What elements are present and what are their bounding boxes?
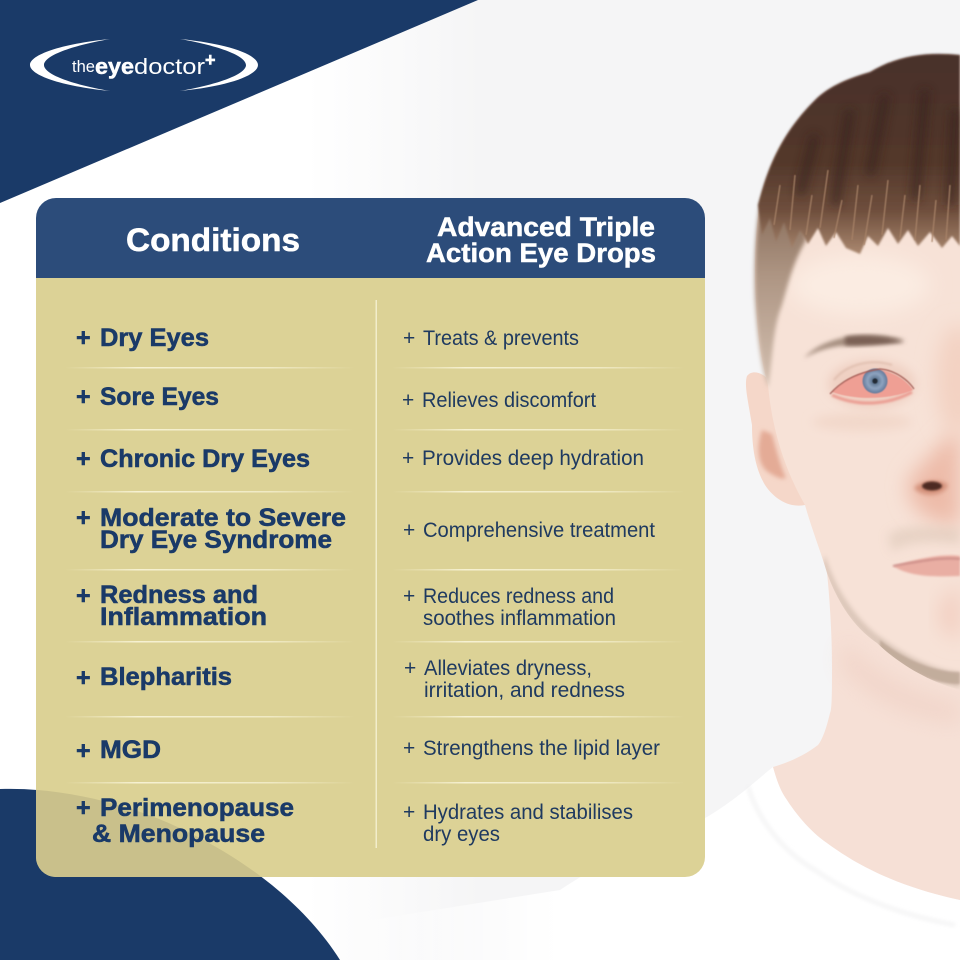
treatment column: dry eyes (423, 823, 500, 846)
treatment column: + (402, 447, 414, 470)
nostril and nose (914, 481, 948, 495)
eye socket (828, 360, 916, 408)
navy shape seen through the panel (36, 790, 261, 877)
treatment column: Relieves discomfort (422, 389, 596, 412)
photo: man with red eye (527, 52, 960, 960)
comparison table panel (36, 198, 705, 877)
treatment column: + (404, 657, 416, 680)
conditions column: & Menopause (92, 820, 265, 848)
navy bottom-left curved shape (0, 789, 340, 960)
conditions column: Sore Eyes (100, 383, 219, 411)
conditions column: + (76, 794, 91, 822)
header: eye drops: Advanced Triple (437, 212, 655, 242)
logo: the eye doctor plus: eye (95, 54, 134, 79)
conditions column (76, 324, 346, 848)
treatment column: soothes inflammation (423, 607, 616, 630)
conditions column: Dry Eye Syndrome (100, 526, 332, 554)
panel header (36, 198, 705, 278)
mouth (893, 555, 960, 576)
conditions column: Blepharitis (100, 663, 232, 691)
conditions column: + (76, 504, 91, 532)
treatment column: Hydrates and stabilises (423, 801, 633, 824)
logo: the eye doctor plus: doctor (134, 54, 205, 79)
conditions column: Redness and (100, 581, 258, 609)
conditions column: + (76, 582, 91, 610)
hair texture (774, 90, 955, 245)
treatment column: Treats & prevents (423, 327, 579, 350)
neck (773, 573, 960, 900)
conditions column: Moderate to Severe (100, 504, 346, 532)
header: eye drops (426, 212, 656, 268)
logo: the eye doctor plus: the (72, 57, 95, 76)
logo: the eye doctor plus (30, 39, 258, 91)
face skin (755, 54, 960, 600)
treatment column: irritation, and redness (424, 679, 625, 702)
conditions column: + (76, 445, 91, 473)
treatment column: Reduces redness and (423, 585, 614, 608)
conditions column: + (76, 664, 91, 692)
eye (832, 370, 913, 398)
hair (758, 54, 960, 254)
header: eye drops: Action Eye Drops (426, 238, 656, 268)
treatment column: Provides deep hydration (422, 447, 644, 470)
hair side fade (752, 200, 807, 386)
treatment column: + (402, 389, 414, 412)
row dividers (65, 367, 685, 784)
treatment column (402, 327, 660, 846)
header: conditions: Conditions (126, 222, 300, 258)
treatment column: + (403, 585, 415, 608)
conditions column: + (76, 324, 91, 352)
conditions column: + (76, 737, 91, 765)
column divider (376, 300, 377, 848)
treatment column: Strengthens the lipid layer (423, 737, 660, 760)
conditions column: Chronic Dry Eyes (100, 445, 310, 473)
conditions column: MGD (100, 736, 161, 764)
conditions column: Perimenopause (100, 794, 294, 822)
treatment column: Comprehensive treatment (423, 519, 655, 542)
conditions column: Inflammation (100, 603, 267, 631)
treatment column: + (403, 737, 415, 760)
navy corner triangle (0, 0, 478, 203)
conditions column: Dry Eyes (100, 324, 209, 352)
stubble (823, 555, 960, 688)
treatment column: + (403, 327, 415, 350)
skin shading and features (790, 255, 960, 688)
eyebrow (804, 335, 905, 358)
logo: the eye doctor plus: + (205, 50, 216, 70)
treatment column: + (403, 519, 415, 542)
t-shirt (527, 768, 960, 960)
treatment column: + (403, 801, 415, 824)
treatment column: Alleviates dryness, (424, 657, 592, 680)
ear (746, 372, 805, 506)
conditions column: + (76, 383, 91, 411)
panel body (36, 278, 705, 877)
